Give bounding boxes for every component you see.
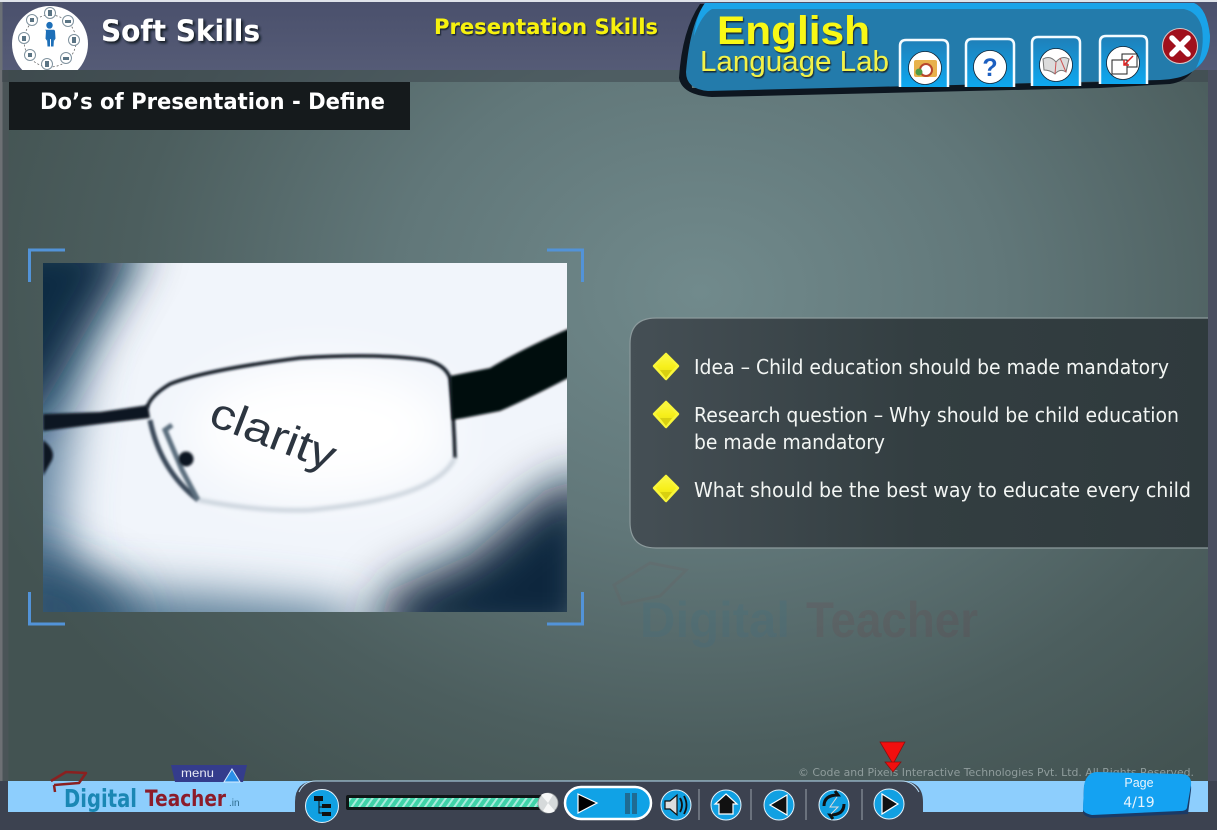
icon: volume xyxy=(661,790,691,820)
menu tab: menu xyxy=(181,766,214,780)
bullet 1: Idea – Child education should be made mandatory xyxy=(694,355,1169,379)
vignette: bottom edge xyxy=(67,552,378,612)
play pause control xyxy=(565,787,651,819)
page counter: 4/19 xyxy=(1123,795,1155,811)
vignette: top left corner xyxy=(43,263,169,440)
bullet 3: What should be the best way to educate every child xyxy=(694,478,1191,502)
icon: yellow diamond xyxy=(654,402,678,427)
panel shape xyxy=(679,4,1192,97)
English Language Lab panel xyxy=(679,3,1210,97)
button: glossary book xyxy=(1032,37,1080,86)
button: help: ? xyxy=(982,54,998,82)
lens bright centre xyxy=(205,372,435,488)
button: close xyxy=(1162,28,1198,64)
icon: replay xyxy=(819,790,849,820)
watermark: Digital Teacher: Teacher xyxy=(806,592,978,648)
icon: soft skills logo xyxy=(12,6,88,70)
photo corner brackets xyxy=(30,250,582,624)
bullet 2 xyxy=(654,402,1179,454)
page counter xyxy=(1083,772,1191,818)
brand text: Language Lab: Language Lab xyxy=(700,46,889,78)
menu tab xyxy=(171,765,247,782)
brand text: English: English xyxy=(717,9,870,53)
icon: next xyxy=(874,789,904,819)
icon: menu tree button xyxy=(306,790,338,822)
progress bar xyxy=(346,793,558,813)
word in lens: clarity: clarity xyxy=(203,389,343,480)
logo: Digital Teacher: .in xyxy=(229,798,240,809)
copyright text: © Code and Pixels Interactive Technologies Pvt. Ltd. All Rights Reserved. xyxy=(798,766,1194,779)
logo: Digital Teacher: Digital xyxy=(64,784,137,813)
page counter: Page xyxy=(1124,776,1154,790)
title bar: Do's of Presentation - Define xyxy=(9,82,410,130)
vignette: left side xyxy=(43,263,155,592)
heading: Soft Skills: Soft Skills xyxy=(101,14,260,48)
player control panel xyxy=(295,781,923,830)
icon: home xyxy=(711,790,741,820)
icon: yellow diamond xyxy=(654,476,678,501)
nose pad xyxy=(150,420,198,500)
lens bottom rim xyxy=(198,458,455,510)
watermark: Digital Teacher xyxy=(614,563,978,648)
heading: Presentation Skills: Presentation Skills xyxy=(434,15,658,39)
bullet 2: be made mandatory xyxy=(694,430,885,454)
icon: yellow diamond xyxy=(654,354,678,379)
glasses lens frame xyxy=(147,356,455,458)
button: help xyxy=(966,39,1014,87)
logo: Digital Teacher: Teacher xyxy=(145,787,226,812)
photo: clarity glasses xyxy=(43,263,567,612)
glasses arms xyxy=(43,405,150,431)
watermark: Digital Teacher: Digital xyxy=(640,592,790,648)
logo: Digital Teacher xyxy=(51,772,240,813)
vignette: bottom left corner xyxy=(43,521,160,612)
arrow: red down indicator xyxy=(880,742,905,772)
vignette: bottom right corner xyxy=(370,470,600,650)
button: resize window xyxy=(1100,36,1147,84)
icon: previous xyxy=(764,790,794,820)
button: history folder xyxy=(900,40,948,87)
title bar: Do's of Presentation - Define: Do’s of Presentation - Define xyxy=(40,90,385,115)
panel: bullet points xyxy=(630,318,1208,548)
bullet 2: Research question – Why should be child education xyxy=(694,403,1179,427)
footer bar xyxy=(0,781,1217,830)
header bar xyxy=(0,0,1217,82)
